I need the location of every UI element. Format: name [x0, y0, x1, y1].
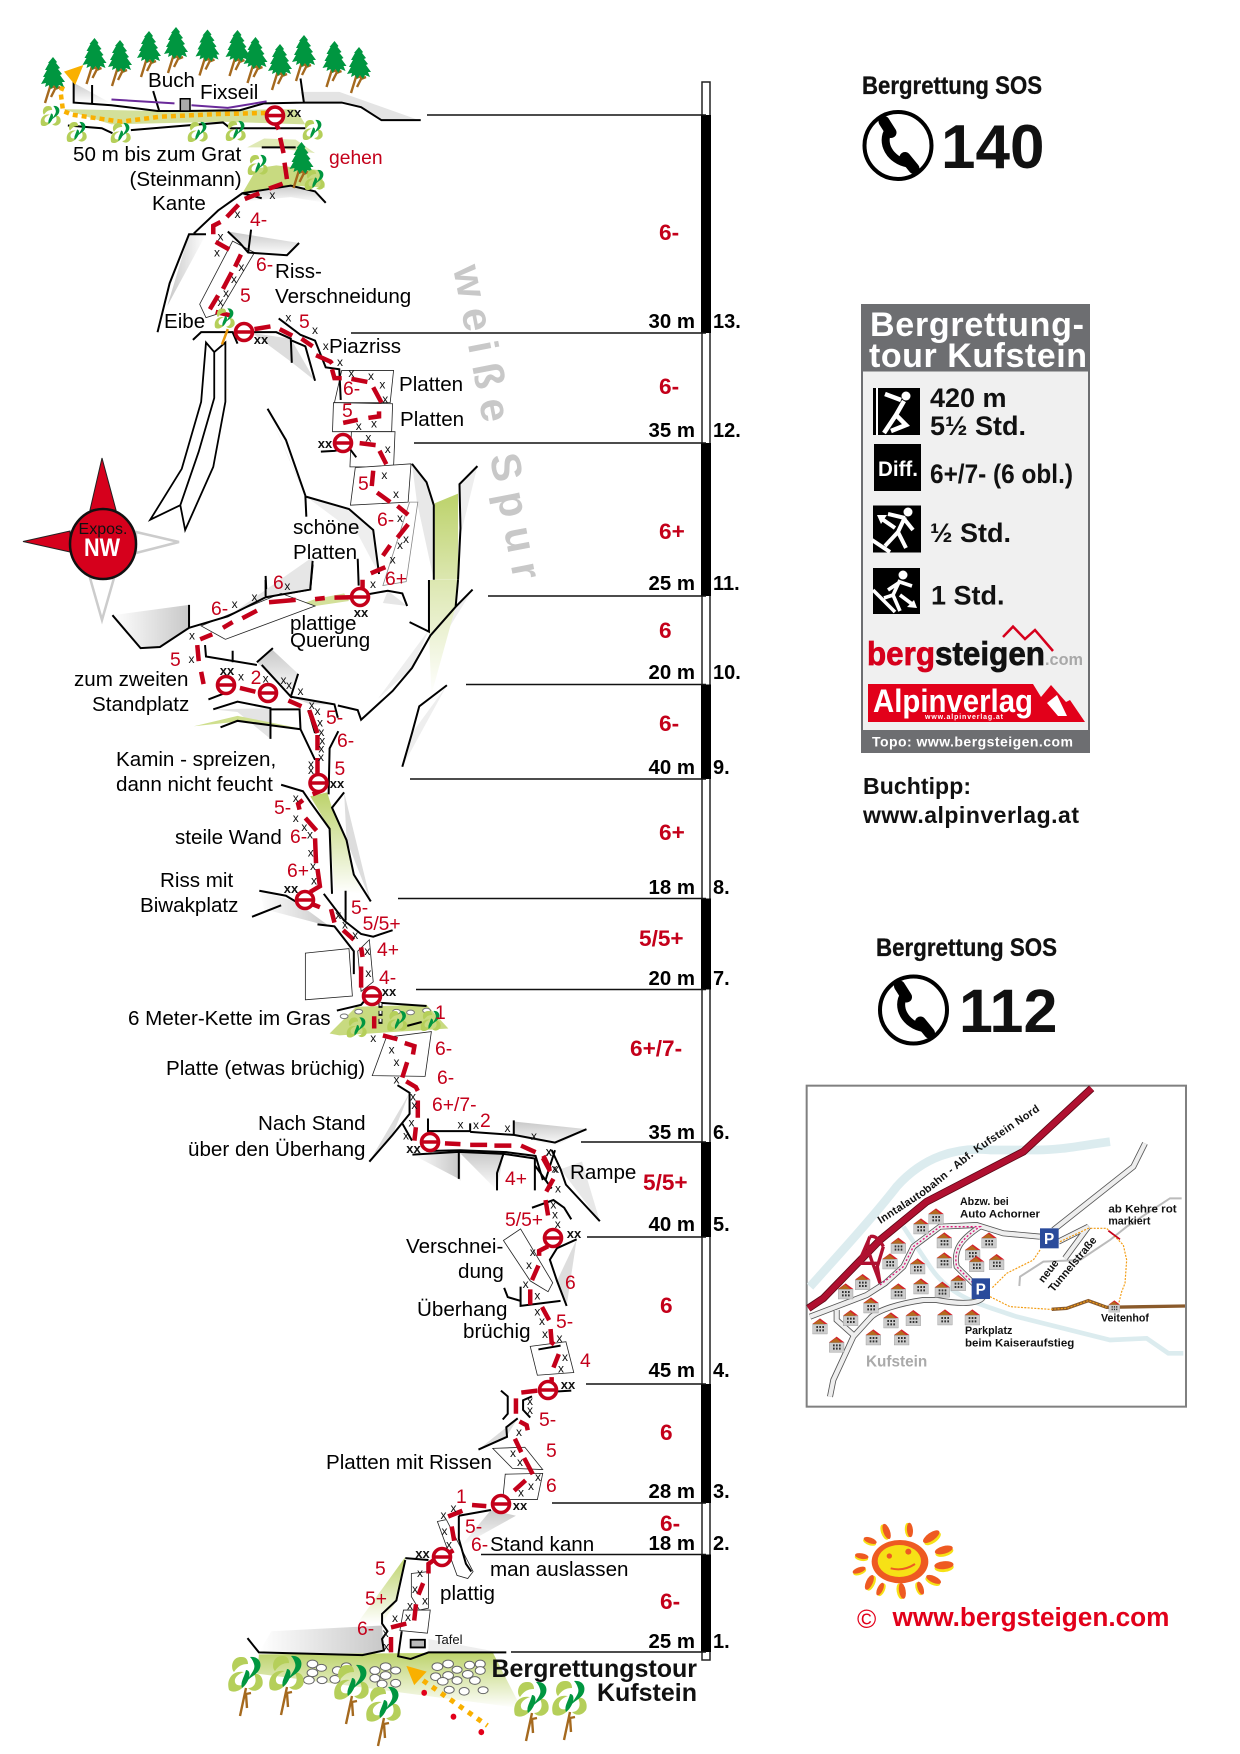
red pitch grades: 5 — [375, 1559, 386, 1580]
black route labels: Fixseil — [200, 81, 258, 104]
icon: difficulty: Diff. — [878, 458, 918, 481]
anchor marks: xx — [406, 1141, 421, 1156]
pitch lengths: 45 m — [649, 1360, 695, 1382]
panel title: tour Kufstein — [869, 337, 1087, 375]
lower rock lines — [247, 1150, 600, 1659]
black route labels: Standplatz — [92, 693, 189, 716]
red marks — [421, 1690, 484, 1735]
red pitch grades: 5 — [546, 1441, 557, 1462]
map labels: Abzw. bei — [960, 1196, 1009, 1208]
overall pitch grades: 6- — [659, 374, 679, 399]
black route labels — [73, 69, 636, 1647]
scale bar — [702, 82, 710, 1660]
sun logo — [852, 1523, 954, 1600]
protection marks: xxxxxxxxxxxxxxxxxxxxxxxxxxxxxxxxxxxx — [383, 1145, 568, 1654]
overall pitch grades: 6+/7- — [630, 1036, 682, 1061]
valley path — [1052, 1301, 1185, 1309]
map labels: Parkplatz — [965, 1325, 1012, 1337]
protection marks — [188, 188, 568, 1654]
black route labels: steile Wand — [175, 826, 282, 849]
height and time: 5½ Std. — [930, 411, 1026, 441]
anchor marks: xx — [513, 1498, 528, 1513]
black route labels: Platten — [399, 373, 463, 396]
protection marks: xxxxxxxxxxxxxxxxxxxxxxxxxxxxxxxxxxxxxxxxxxxxx — [188, 579, 559, 1176]
anchor marks: xx — [561, 1377, 576, 1392]
height and time: 420 m — [930, 383, 1007, 413]
red pitch grades: 6- — [290, 827, 307, 848]
trees at base — [228, 1656, 587, 1746]
route title: Kufstein — [597, 1679, 697, 1707]
difficulty value: 6+/7- (6 obl.) — [930, 459, 1073, 489]
anchor marks: xx — [415, 1546, 430, 1561]
info panel — [861, 305, 1089, 752]
black route labels: schöne — [293, 516, 359, 539]
pitch numbers: 7. — [713, 968, 730, 990]
access map — [806, 1084, 1187, 1408]
red pitch grades: 5- — [465, 1517, 482, 1538]
red pitch grades: 4- — [379, 968, 396, 989]
map labels: ab Kehre rot — [1108, 1204, 1177, 1216]
black route labels: Biwakplatz — [140, 894, 238, 917]
tunnel road — [1019, 1198, 1182, 1286]
icon: descent — [873, 568, 920, 614]
pitch numbers: 5. — [713, 1214, 730, 1236]
red pitch grades — [170, 148, 591, 1640]
approach arrow — [406, 1666, 427, 1685]
black route labels: Überhang — [417, 1298, 507, 1321]
rivers — [810, 1142, 1183, 1353]
overall pitch grades: 5/5+ — [639, 926, 684, 951]
red pitch grades: 4 — [580, 1351, 591, 1372]
upper rock lines — [68, 78, 477, 597]
anchor marks: xx — [254, 332, 269, 347]
red pitch grades: 6- — [256, 255, 273, 276]
pitch lengths: 28 m — [649, 1481, 695, 1503]
rope upper — [210, 122, 408, 589]
protection marks: xxxxxxxxxxxxxxxxxxxxxxxxxxx — [214, 188, 409, 591]
red pitch grades: 5- — [539, 1410, 556, 1431]
map labels — [866, 1104, 1177, 1371]
chain — [378, 1003, 382, 1025]
weisse Spur watermark: weiße Spur — [444, 260, 551, 583]
black route labels: Verschneidung — [275, 285, 411, 308]
black route labels: Riss- — [275, 260, 322, 283]
map labels: beim Kaiseraufstieg — [965, 1338, 1074, 1350]
icon: climber — [873, 388, 920, 435]
black route labels: Buch — [148, 69, 195, 92]
pitch numbers: 13. — [713, 311, 741, 333]
red pitch grades: 6- — [435, 1039, 452, 1060]
overall pitch grades — [630, 220, 688, 1614]
overall pitch grades: 6 — [660, 1420, 673, 1445]
black route labels: Eibe — [164, 310, 205, 333]
compass exposure: NW — [84, 534, 120, 562]
red pitch grades: 6 — [565, 1273, 576, 1294]
red pitch grades: 4+ — [505, 1169, 527, 1190]
red pitch grades: 5- — [556, 1312, 573, 1333]
red pitch grades: 5- — [274, 798, 291, 819]
website footer: © — [857, 1604, 876, 1634]
icon: difficulty — [874, 444, 921, 491]
rope middle — [197, 597, 550, 1171]
panel footer: Topo: www.bergsteigen.com — [872, 734, 1073, 750]
map labels: Tunnelstraße — [1046, 1235, 1099, 1295]
pitch numbers: 10. — [713, 662, 741, 684]
anchor marks: xx — [382, 984, 397, 999]
rope lower — [391, 1156, 559, 1652]
red pitch grades: 5- — [351, 898, 368, 919]
SOS 112 block — [876, 934, 1057, 1045]
route title: Bergrettungstour — [491, 1655, 697, 1683]
SOS 140 block: Bergrettung SOS — [862, 72, 1042, 100]
route lower section — [247, 1150, 600, 1735]
red pitch grades: 5 — [334, 759, 345, 780]
climbing plates middle — [201, 593, 431, 1076]
red pitch grades: 5/5+ — [363, 914, 401, 935]
pitch numbers: 12. — [713, 420, 741, 442]
black route labels: man auslassen — [490, 1558, 629, 1581]
logo: bergsteigen — [867, 627, 1083, 672]
black route labels: brüchig — [463, 1320, 531, 1343]
pitch lengths: 35 m — [649, 1122, 695, 1144]
website footer: www.bergsteigen.com — [892, 1602, 1169, 1632]
grass stones — [340, 1008, 430, 1019]
book tip — [862, 773, 1079, 828]
panel title: Bergrettung- — [870, 306, 1084, 344]
black route labels: Kante — [152, 192, 206, 215]
pitch numbers: 3. — [713, 1481, 730, 1503]
approach time: ½ Std. — [930, 518, 1011, 548]
black route labels: zum zweiten — [74, 668, 188, 691]
red pitch grades: 2 — [480, 1111, 491, 1132]
logo: bergsteigen: steigen — [935, 635, 1045, 672]
stones — [304, 1660, 488, 1695]
belay stations — [217, 107, 562, 1566]
overall pitch grades: 6- — [659, 220, 679, 245]
red pitch grades: 6- — [211, 599, 228, 620]
anchor marks: xx — [318, 436, 333, 451]
pitch numbers — [713, 311, 741, 1653]
black route labels: (Steinmann) — [130, 168, 242, 191]
info board — [411, 1640, 425, 1647]
panel title — [869, 306, 1087, 375]
icon: approach — [872, 506, 921, 552]
overall pitch grades: 6- — [660, 1511, 680, 1536]
black route labels: plattig — [440, 1582, 495, 1605]
red pitch grades: 6+ — [287, 861, 309, 882]
black route labels: Querung — [290, 629, 370, 652]
black route labels: Platten mit Rissen — [326, 1451, 492, 1474]
summit book — [180, 99, 190, 111]
roads — [810, 1143, 1145, 1397]
red pitch grades: 4+ — [377, 940, 399, 961]
red pitch grades: 6 — [546, 1476, 557, 1497]
green bands upper — [63, 109, 458, 580]
black route labels: Platte (etwas brüchig) — [166, 1057, 365, 1080]
black route labels: Nach Stand — [258, 1112, 366, 1135]
pitch numbers: 1. — [713, 1631, 730, 1653]
SOS 112 block: 112 — [959, 977, 1057, 1045]
black route labels: dung — [458, 1260, 504, 1283]
black route labels: Riss mit — [160, 869, 233, 892]
pitch lengths: 35 m — [649, 420, 695, 442]
descent time: 1 Std. — [931, 580, 1005, 610]
pitch lengths: 18 m — [649, 877, 695, 899]
overall pitch grades: 6+ — [659, 519, 685, 544]
anchor marks: xx — [220, 663, 235, 678]
red pitch grades: 5 — [358, 474, 369, 495]
red pitch grades: 5 — [299, 312, 310, 333]
anchor marks: xx — [330, 776, 345, 791]
climbing plates lower — [400, 1229, 574, 1633]
black route labels: plattige — [290, 612, 356, 635]
black route labels: Verschnei- — [406, 1235, 503, 1258]
map labels: Inntalautobahn - Abf. Kufstein Nord — [877, 1104, 1040, 1224]
red pitch grades: 5+ — [365, 1589, 387, 1610]
red pitch grades: 6- — [437, 1068, 454, 1089]
logo: bergsteigen: berg — [867, 635, 935, 672]
logo: Alpinverlag: Alpinverlag — [873, 683, 1033, 719]
black route labels: 6 Meter-Kette im Gras — [128, 1007, 331, 1030]
pitch lines — [351, 115, 706, 1652]
red pitch grades: 1 — [435, 1003, 446, 1024]
green grass lower — [257, 1557, 521, 1708]
logo: bergsteigen: .com — [1045, 650, 1083, 669]
anchor marks: xx — [354, 605, 369, 620]
compass exposure: Expos. — [79, 521, 127, 538]
book tip: www.alpinverlag.at — [862, 802, 1079, 828]
black route labels: Kamin - spreizen, — [116, 748, 276, 771]
yellow arrow — [64, 65, 83, 85]
pitch numbers: 11. — [713, 573, 740, 595]
pitch lengths: 20 m — [649, 968, 695, 990]
chimney pillar — [150, 343, 225, 530]
approach dotted path — [423, 1681, 487, 1726]
overall pitch grades: 6 — [659, 618, 672, 643]
pitch numbers: 2. — [713, 1533, 730, 1555]
red pitch grades: 6+/7- — [432, 1095, 476, 1116]
map labels: neue — [1036, 1258, 1061, 1285]
climbing plates upper — [200, 241, 418, 586]
parking signs: P — [1044, 1231, 1054, 1248]
shading lower — [259, 1152, 600, 1655]
map labels: Auto Achorner — [960, 1208, 1040, 1220]
black route labels: 50 m bis zum Grat — [73, 143, 242, 166]
pitch lengths: 30 m — [649, 311, 695, 333]
yellow descent path — [61, 86, 269, 122]
green bands middle — [194, 580, 458, 1035]
parking signs: P — [976, 1282, 986, 1299]
overall pitch grades: 6- — [659, 711, 679, 736]
houses — [812, 1208, 1120, 1352]
yew trunk — [222, 329, 228, 344]
compass exposure — [23, 458, 179, 620]
pitch lengths: 25 m — [649, 1631, 695, 1653]
bushes — [41, 106, 441, 1038]
red pitch grades: 6- — [357, 1619, 374, 1640]
pitch lengths: 40 m — [649, 757, 695, 779]
overall pitch grades: 6+ — [659, 820, 685, 845]
red pitch grades: 5 — [170, 650, 181, 671]
anchor marks: xx — [284, 881, 299, 896]
red marker — [1108, 1231, 1120, 1239]
SOS 140 block — [862, 72, 1044, 182]
red pitch grades: gehen — [329, 148, 383, 169]
black route labels: Platten — [400, 408, 464, 431]
map labels: Kufstein — [866, 1354, 927, 1371]
route upper section — [61, 65, 477, 597]
black route labels: dann nicht feucht — [116, 773, 273, 796]
pitch lengths: 25 m — [649, 573, 695, 595]
book tip: Buchtipp: — [863, 773, 971, 799]
pitch numbers: 8. — [713, 877, 730, 899]
route title — [491, 1655, 697, 1707]
black route labels: Stand kann — [490, 1533, 594, 1556]
firs on top — [41, 27, 371, 188]
red pitch grades: 5 — [240, 286, 251, 307]
parking signs — [972, 1228, 1059, 1299]
pitch lengths — [649, 311, 695, 1653]
pitch lengths: 18 m — [649, 1533, 695, 1555]
red pitch grades: 6- — [343, 379, 360, 400]
pitch numbers: 6. — [713, 1122, 730, 1144]
orange paths — [990, 1228, 1127, 1309]
overall pitch grades: 5/5+ — [643, 1170, 688, 1195]
motorway — [808, 1088, 1092, 1308]
black route labels: Platten — [293, 541, 357, 564]
anchor marks — [220, 105, 582, 1561]
black route labels: Rampe — [570, 1161, 636, 1184]
overall pitch grades: 6- — [660, 1589, 680, 1614]
pink route — [880, 1227, 980, 1285]
red pitch grades: 5 — [342, 401, 353, 422]
pitch numbers: 4. — [713, 1360, 730, 1382]
red pitch grades: 1 — [456, 1487, 467, 1508]
map labels: Veitenhof — [1101, 1313, 1149, 1325]
red pitch grades: 6+ — [385, 569, 407, 590]
anchor marks: xx — [287, 105, 302, 120]
route middle section — [112, 557, 586, 1181]
middle rock lines — [112, 561, 586, 1181]
overall pitch grades: 6 — [660, 1293, 673, 1318]
pitch numbers: 9. — [713, 757, 730, 779]
height and time — [930, 383, 1026, 441]
pitch lengths: 40 m — [649, 1214, 695, 1236]
black route labels: über den Überhang — [188, 1138, 365, 1161]
shading upper — [73, 82, 477, 580]
red pitch grades: 4- — [250, 210, 267, 231]
black route labels: Piazriss — [329, 335, 401, 358]
pitch lengths: 20 m — [649, 662, 695, 684]
red pitch grades: 6 — [273, 573, 284, 594]
map labels: markiert — [1108, 1215, 1151, 1227]
red pitch grades: 6- — [337, 731, 354, 752]
shading middle — [112, 557, 586, 1181]
anchor marks: xx — [567, 1226, 582, 1241]
red pitch grades: 5- — [326, 708, 343, 729]
black route labels: Tafel — [435, 1632, 463, 1647]
SOS 112 block: Bergrettung SOS — [876, 934, 1057, 962]
red pitch grades: 6- — [471, 1535, 488, 1556]
SOS 140 block: 140 — [941, 113, 1044, 182]
red pitch grades: 5/5+ — [505, 1210, 543, 1231]
fixed rope — [111, 100, 267, 108]
logo: Alpinverlag: www.alpinverlag.at — [924, 714, 1004, 721]
red pitch grades: 6- — [377, 510, 394, 531]
red pitch grades: 2 — [251, 668, 261, 689]
